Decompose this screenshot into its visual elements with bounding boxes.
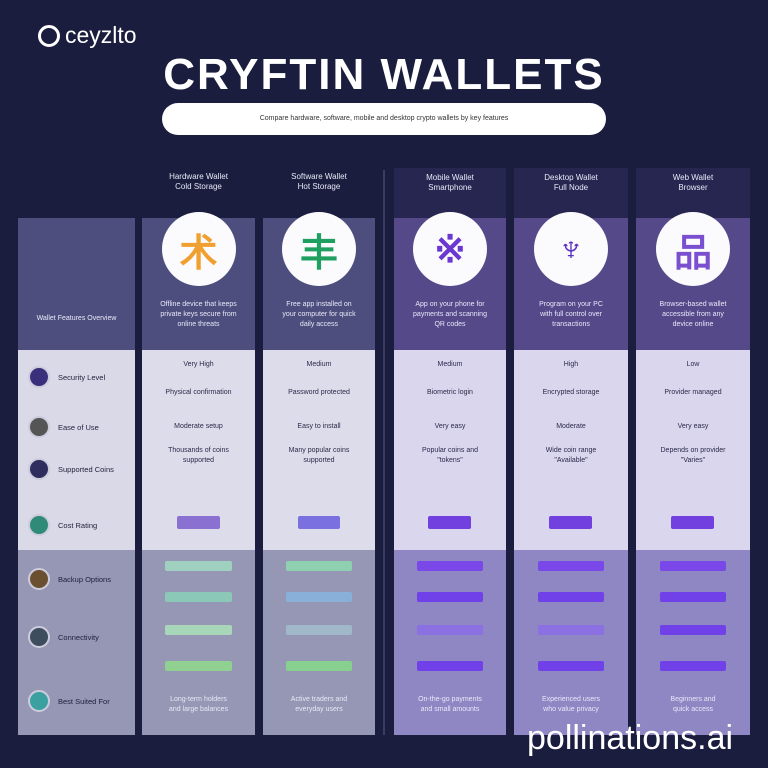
column: software: Many popular coins [289,447,349,454]
column: desktop: "Available" [554,457,588,464]
column: hardware: Moderate setup [174,423,223,430]
column: web [636,168,750,735]
column: mobile: "tokens" [437,457,463,464]
column: mobile: Medium [438,361,462,368]
label column: Supported Coins [58,464,114,474]
column: software: Active traders and [291,696,347,703]
column: web: Low [687,361,699,368]
column: hardware: online threats [177,321,220,328]
column: mobile: Biometric login [427,389,473,396]
column: hardware: Offline device that keeps [160,301,237,308]
column: mobile: QR codes [434,321,466,328]
column: hardware: private keys secure from [160,311,237,318]
column: software [263,172,375,735]
column: hardware: Long-term holders [170,696,227,703]
column: web: Web Wallet [673,173,713,182]
column: web: accessible from any [662,311,724,318]
column: software: Easy to install [297,423,341,430]
column: desktop: High [564,361,578,368]
column: mobile: and small amounts [421,706,479,713]
column: mobile: Smartphone [428,183,472,192]
column: hardware: and large balances [169,706,228,713]
column: web: device online [673,321,713,328]
subtitle pill: Compare hardware, software, mobile and desktop crypto wallets by key features [260,115,508,122]
column: desktop: Desktop Wallet [544,173,598,182]
column: mobile: ※ [434,228,466,270]
column: desktop: Encrypted storage [543,389,599,396]
column: desktop: with full control over [540,311,602,318]
column: mobile: Mobile Wallet [426,173,474,182]
column: mobile: On-the-go payments [418,696,482,703]
column: hardware: 术 [179,232,218,274]
column: mobile: App on your phone for [415,301,485,308]
column: desktop [514,168,628,735]
column: web: 品 [674,232,712,274]
column: software: Hot Storage [298,182,340,191]
column: web: Beginners and [670,696,716,703]
column: desktop: transactions [552,321,590,328]
label column: Best Suited For [58,696,110,706]
column: software: everyday users [295,706,343,713]
column: software: Software Wallet [291,172,347,181]
column: web: Browser [678,183,708,192]
column: hardware: Very High [183,361,214,368]
column: software: Password protected [288,389,350,396]
column: web: Browser-based wallet [660,301,726,308]
column: software: Medium [307,361,331,368]
column: desktop: Full Node [554,183,588,192]
logo: ceyzlto [65,22,137,48]
column: desktop: who value privacy [543,706,599,713]
label column [18,218,135,735]
column: software: supported [303,457,335,464]
watermark: pollinations.ai [527,719,733,757]
column: hardware: supported [183,457,214,464]
label column: Security Level [58,372,105,382]
column: hardware [142,172,255,735]
label column: Ease of Use [58,422,99,432]
label column: Backup Options [58,574,111,584]
column: mobile: payments and scanning [413,311,487,318]
column: mobile: Very easy [435,423,465,430]
column: mobile: Popular coins and [422,447,478,454]
column: desktop: Wide coin range [546,447,596,454]
column: web: Depends on provider [660,447,726,454]
label column: Wallet Features Overview [37,315,116,322]
column: desktop: Program on your PC [539,301,603,308]
column: desktop: Experienced users [542,696,600,703]
column: hardware: Hardware Wallet [169,172,228,181]
label column: Connectivity [58,632,99,642]
column: hardware: Physical confirmation [165,389,232,396]
column: hardware: Thousands of coins [168,447,229,454]
column: software: your computer for quick [282,311,356,318]
column: hardware: Cold Storage [175,182,222,191]
label column: Cost Rating [58,520,97,530]
column: web: Provider managed [664,389,722,396]
column: web: "Varies" [681,457,705,464]
column: web: Very easy [678,423,708,430]
divider [383,170,385,735]
column: web: quick access [673,706,713,713]
column: software: daily access [300,321,338,328]
column: software: 丰 [300,232,338,274]
subtitle pill [162,103,606,135]
column: desktop: ♆ [557,228,585,270]
column: software: Free app installed on [286,301,352,308]
title: CRYFTIN WALLETS [163,50,605,99]
column: mobile [394,168,506,735]
column: desktop: Moderate [556,423,586,430]
